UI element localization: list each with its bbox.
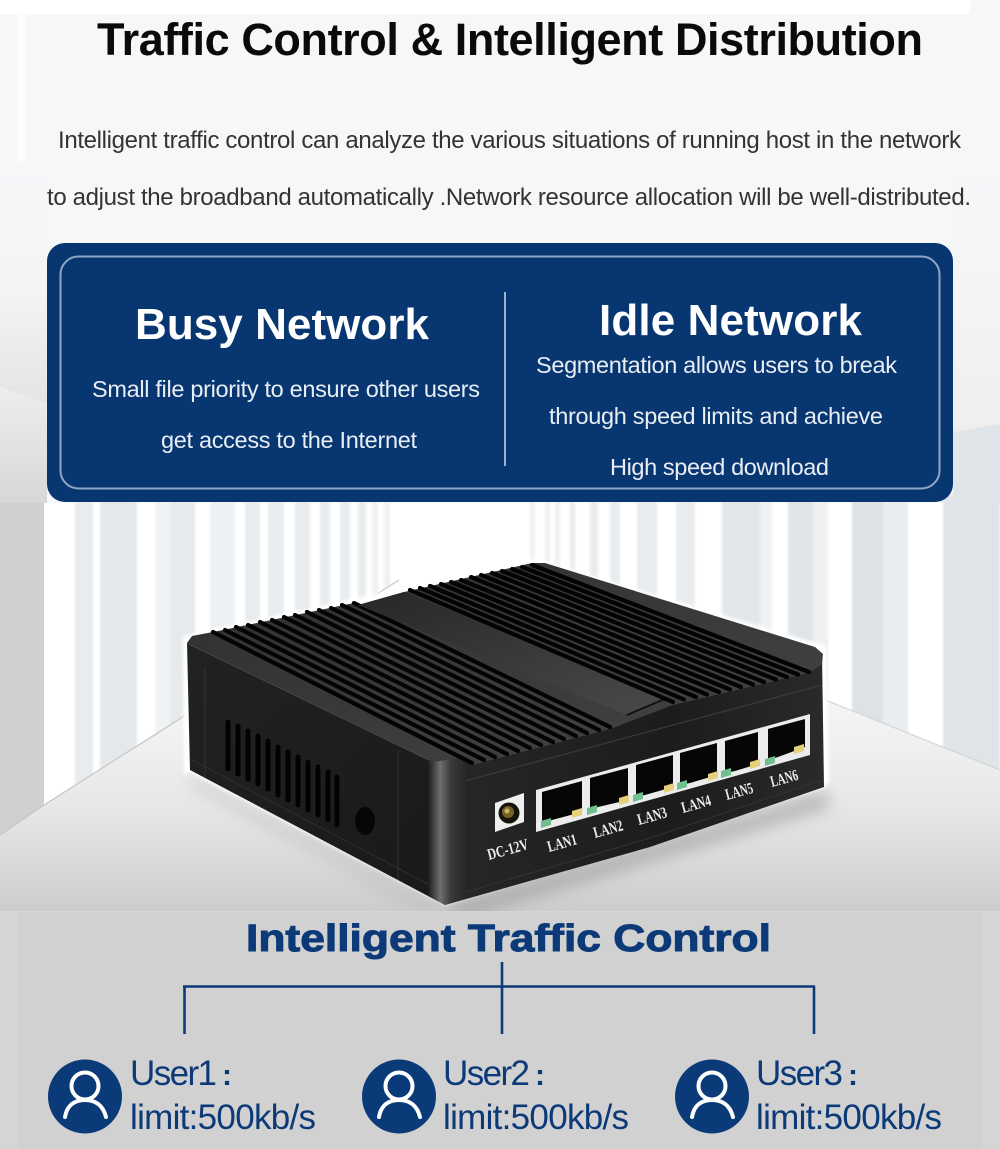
user 3 text: : [848,1059,858,1092]
port labels: LAN5 [724,780,755,804]
DC power jack [495,793,524,832]
user 2 [362,1054,629,1137]
intro text: to adjust the broadband automatically .Network resource allocation will be well-distributed. [47,184,971,211]
top surface [187,563,823,765]
busy network text: Busy Network [135,300,430,349]
port labels: LAN6 [769,767,800,791]
port labels: LAN3 [636,805,669,829]
side face [187,643,445,905]
icon: user [48,1060,122,1134]
user 1 text: User1 [130,1054,217,1093]
power button [355,807,375,835]
intro text: Intelligent traffic control can analyze the various situations of running host in the network [58,127,962,154]
user 1 text [130,1054,316,1137]
port labels: LAN4 [680,793,713,817]
icon: user [675,1060,749,1134]
idle network text [536,296,897,480]
idle network text: High speed download [610,454,829,480]
user 2 text: limit:500kb/s [443,1098,629,1137]
device halo [183,559,829,905]
side vents [228,722,337,825]
busy network text [92,300,480,453]
busy network text: get access to the Internet [161,427,417,453]
user 3 text: limit:500kb/s [756,1098,942,1137]
center strip [358,592,667,715]
user 2 text: User2 [443,1054,530,1093]
corridor backdrop [0,495,1000,911]
idle network text: Idle Network [599,296,863,345]
right heat-sink fins [410,565,809,702]
port labels [486,767,800,864]
user 3 text: User3 [756,1054,843,1093]
icon: user [362,1060,436,1134]
user 2 text: : [535,1059,545,1092]
user 1 text: : [222,1059,232,1092]
port LEDs [541,744,804,828]
heading: intelligent traffic control: Intelligent Traffic Control [246,918,771,960]
idle network text: through speed limits and achieve [549,403,883,429]
user 3 [675,1054,942,1137]
user 1 text: limit:500kb/s [130,1098,316,1137]
busy network text: Small file priority to ensure other users [92,376,480,402]
port labels: LAN1 [546,832,579,856]
port labels: DC-12V [486,836,531,864]
user 2 text [443,1054,629,1137]
ports [542,719,805,824]
floor shadow [190,772,830,920]
user 1 [48,1054,316,1137]
connector lines [183,962,815,1034]
LAN port panel [536,714,810,832]
front face [428,654,824,905]
panel: network modes [47,243,953,502]
idle network text: Segmentation allows users to break [536,352,897,378]
title: Traffic Control & Intelligent Distribution [97,14,923,65]
user 3 text [756,1054,942,1137]
device: mini router [183,559,829,905]
bottom band [0,911,1000,1149]
port labels: LAN2 [592,818,625,842]
left heat-sink fins [213,603,610,763]
intro text [47,127,971,211]
